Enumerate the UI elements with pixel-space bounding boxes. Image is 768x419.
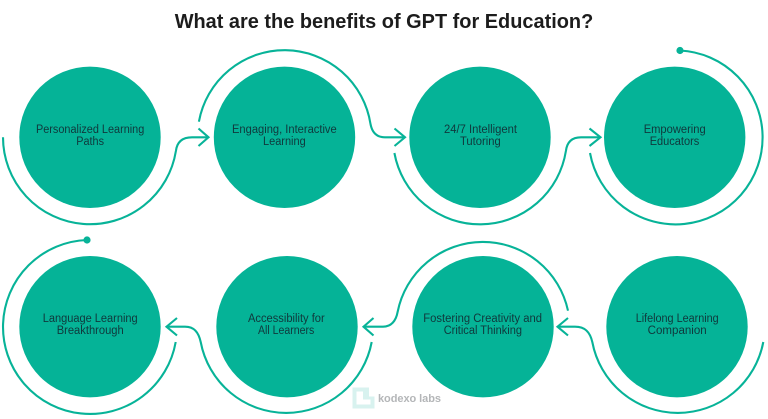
step 5: Language Learning Breakthrough [19, 256, 161, 397]
arrow: step 7 to step 6 [364, 242, 568, 336]
step 7: Fostering Creativity and Critical Thinking: Critical Thinking [444, 325, 522, 337]
logo: kodexo labs [352, 388, 441, 408]
step 5: Language Learning Breakthrough: Language Learning [43, 313, 138, 325]
step 4: Empowering Educators: Educators [650, 136, 700, 148]
step 3: 24/7 Intelligent Tutoring: Tutoring [460, 136, 501, 148]
step 1: Personalized Learning Paths: Paths [76, 136, 104, 148]
arrow: step 8 to step 7 [558, 318, 763, 413]
step 6: Accessibility for All Learners: Accessibility for [248, 313, 325, 325]
logo: kodexo labs: kodexo labs [378, 393, 441, 405]
step 4: Empowering Educators [604, 67, 745, 208]
connector arc with dot around step 5 [3, 236, 176, 414]
step 2: Engaging, Interactive Learning [214, 67, 355, 208]
step 7: Fostering Creativity and Critical Thinking: Fostering Creativity and [423, 313, 542, 325]
step 4: Empowering Educators: Empowering [644, 124, 706, 136]
step 8: Lifelong Learning Companion: Lifelong Learning [636, 313, 719, 325]
arrow: step 2 to step 3 [199, 50, 405, 146]
arrow: step 6 to step 5 [166, 318, 372, 413]
step 6: Accessibility for All Learners: All Learners [258, 325, 315, 337]
title: What are the benefits of GPT for Education? [175, 11, 593, 33]
step 7: Fostering Creativity and Critical Thinking [412, 256, 554, 397]
step 1: Personalized Learning Paths: Personalized Learning [36, 124, 144, 136]
arrow: step 3 to step 4 [394, 128, 600, 224]
step 3: 24/7 Intelligent Tutoring [409, 67, 551, 208]
step 1: Personalized Learning Paths [19, 67, 161, 208]
step 8: Lifelong Learning Companion: Companion [648, 325, 707, 337]
step 8: Lifelong Learning Companion [606, 256, 748, 397]
step 2: Engaging, Interactive Learning: Learning [263, 136, 306, 148]
step 6: Accessibility for All Learners [216, 256, 358, 397]
step 2: Engaging, Interactive Learning: Engaging, Interactive [232, 124, 337, 136]
step 3: 24/7 Intelligent Tutoring: 24/7 Intelligent [444, 124, 518, 136]
arrow: step 1 to step 2 [3, 128, 208, 224]
connector arc with dot around step 4 [590, 47, 763, 224]
step 5: Language Learning Breakthrough: Breakthrough [57, 325, 124, 337]
